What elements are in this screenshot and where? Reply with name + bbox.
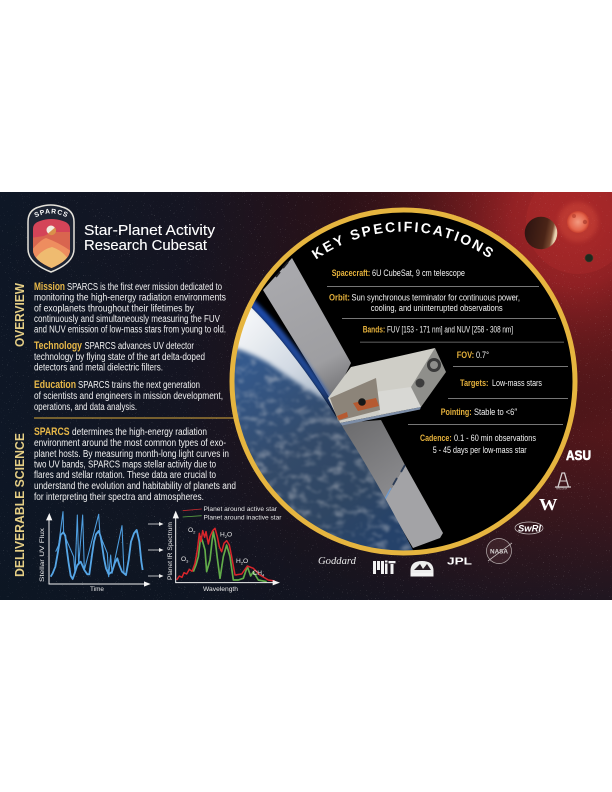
chart: planet IR spectrum: Planet around inactive star	[204, 514, 282, 522]
chart: stellar UV flux light curve: Time	[90, 586, 104, 593]
logo: SPARCS mission badge: SPARCS	[34, 208, 68, 217]
title: Research Cubesat	[84, 238, 207, 254]
text block: education: of scientists and engineers in mission development,	[34, 391, 223, 402]
logo: NASA	[486, 538, 512, 564]
illustration: CubeSat body	[328, 348, 446, 426]
spec: orbit	[329, 292, 520, 313]
title	[84, 223, 216, 254]
text block: mission: SPARCS is the first ever mission dedicated to	[67, 282, 222, 293]
text block: technology: technology by flying state of the art delta-doped	[34, 352, 205, 363]
chart: stellar UV flux light curve	[39, 512, 151, 593]
arrows between charts	[148, 522, 164, 578]
section label: overview: OVERVIEW	[12, 282, 27, 347]
spec: cadence: Cadence:	[420, 433, 452, 443]
text block: mission: continuously and simultaneously measuring the FUV	[34, 314, 220, 325]
chart: planet IR spectrum: Wavelength	[203, 586, 238, 593]
chart: planet IR spectrum: O	[181, 556, 186, 563]
spec: spacecraft: Spacecraft:	[332, 268, 370, 278]
chart: planet IR spectrum: 3	[186, 558, 189, 564]
text block: deliverable science: understand the evolution and habitability of planets and	[34, 481, 236, 492]
banner background	[0, 192, 612, 600]
heading: key specifications: KEY SPECIFICATIONS	[311, 222, 493, 260]
logo: ASU: ASU	[566, 447, 591, 463]
spec: field of view	[457, 350, 489, 360]
spec: bands	[363, 324, 513, 334]
spec: field of view: 0.7°	[476, 350, 489, 360]
text block: deliverable science: determines the high-energy radiation	[72, 427, 207, 438]
text block: deliverable science: environment around the most common types of exo-	[34, 438, 226, 449]
logo: NASA: NASA	[490, 548, 508, 556]
text block: mission: of exoplanets throughout their lifetimes by	[34, 303, 194, 314]
logo: University of Arizona: ARIZONA	[556, 488, 567, 490]
illustration: Earth limb	[234, 298, 413, 550]
chart: planet IR spectrum: H	[236, 558, 241, 565]
spec: orbit: cooling, and uninterrupted observations	[371, 303, 503, 313]
illustration: solar panels	[263, 258, 443, 548]
title: Star-Planet Activity	[84, 223, 216, 239]
text block: education: SPARCS trains the next generation	[78, 380, 200, 391]
text block: education: Education	[34, 379, 76, 391]
chart: planet IR spectrum: Planet around active star	[204, 506, 278, 513]
logo: SwRI: SwRI	[518, 524, 541, 534]
spec: targets: Targets:	[460, 378, 488, 388]
logo: SPARCS mission badge	[27, 204, 75, 273]
text block: technology	[34, 340, 205, 374]
text block: education: operations, and data analysis.	[34, 402, 137, 413]
chart: planet IR spectrum: 4	[262, 572, 265, 578]
chart: planet IR spectrum: 2	[241, 560, 244, 566]
text block: mission: monitoring the high-energy radiation environments	[34, 293, 226, 304]
text block: deliverable science: planet hosts. By measuring month-long light curves in	[34, 449, 229, 460]
spec: targets	[460, 378, 542, 388]
text block: mission	[34, 281, 226, 336]
text block: technology: SPARCS advances UV detector	[84, 341, 195, 352]
spec: pointing: Pointing:	[441, 407, 472, 417]
text block: technology: detectors and metal dielectric filters.	[34, 363, 163, 374]
spec: bands: Bands:	[363, 324, 385, 334]
chart: planet IR spectrum: O	[227, 532, 232, 538]
chart: planet IR spectrum: CH	[252, 570, 262, 577]
spec: cadence	[420, 433, 536, 455]
spec: cadence: 0.1 - 60 min observations	[454, 433, 536, 443]
chart: planet IR spectrum	[167, 506, 282, 593]
spec: cadence: 5 - 45 days per low-mass star	[433, 445, 527, 455]
chart: planet IR spectrum: 2	[225, 534, 228, 539]
text block: deliverable science	[34, 426, 236, 503]
text block: technology: Technology	[34, 340, 82, 352]
logo: University of Washington: W	[539, 495, 558, 514]
spec: field of view: FOV:	[457, 350, 474, 360]
text block: mission: and NUV emission of low-mass stars from young to old.	[34, 325, 226, 336]
chart: planet IR spectrum: 2	[193, 530, 196, 534]
chart: planet IR spectrum: H	[220, 532, 225, 538]
text block: deliverable science: two UV bands, SPARCS maps stellar activity due to	[34, 460, 216, 470]
spec: spacecraft: 6U CubeSat, 9 cm telescope	[372, 268, 465, 278]
spec: orbit: Orbit:	[329, 292, 350, 302]
spec: spacecraft	[332, 268, 465, 278]
chart: stellar UV flux light curve: Stellar UV Flux	[39, 527, 46, 582]
logo: JPL: JPL	[447, 556, 472, 568]
chart: planet IR spectrum: Planet IR Spectrum	[167, 521, 174, 580]
logo: MIT	[373, 560, 396, 574]
illustration: red star and planets	[524, 192, 612, 274]
panel: key specifications circle	[230, 208, 578, 556]
logo: observatory arc	[410, 561, 434, 576]
spec: pointing: Stable to <6″	[474, 407, 518, 417]
chart: planet IR spectrum: O	[188, 527, 193, 534]
text block: deliverable science: SPARCS	[34, 426, 70, 438]
spec: bands: FUV [153 - 171 nm] and NUV [258 - 308 nm]	[387, 324, 513, 334]
spec: orbit: Sun synchronous terminator for continuous power,	[352, 292, 520, 302]
text block: mission: Mission	[34, 281, 65, 293]
text block: deliverable science: flares and stellar rotation. These data are crucial to	[34, 470, 216, 481]
logo: University of Arizona	[555, 473, 571, 490]
text block: deliverable science: for interpreting their spectra and atmospheres.	[34, 492, 204, 503]
gold ring	[232, 210, 575, 553]
logo: Goddard: Goddard	[318, 556, 357, 567]
chart: planet IR spectrum: O	[243, 558, 248, 565]
spec: targets: Low-mass stars	[492, 378, 542, 388]
section label: deliverable science: DELIVERABLE SCIENCE	[12, 433, 27, 577]
text block: education	[34, 379, 223, 413]
spec: pointing	[441, 407, 518, 417]
